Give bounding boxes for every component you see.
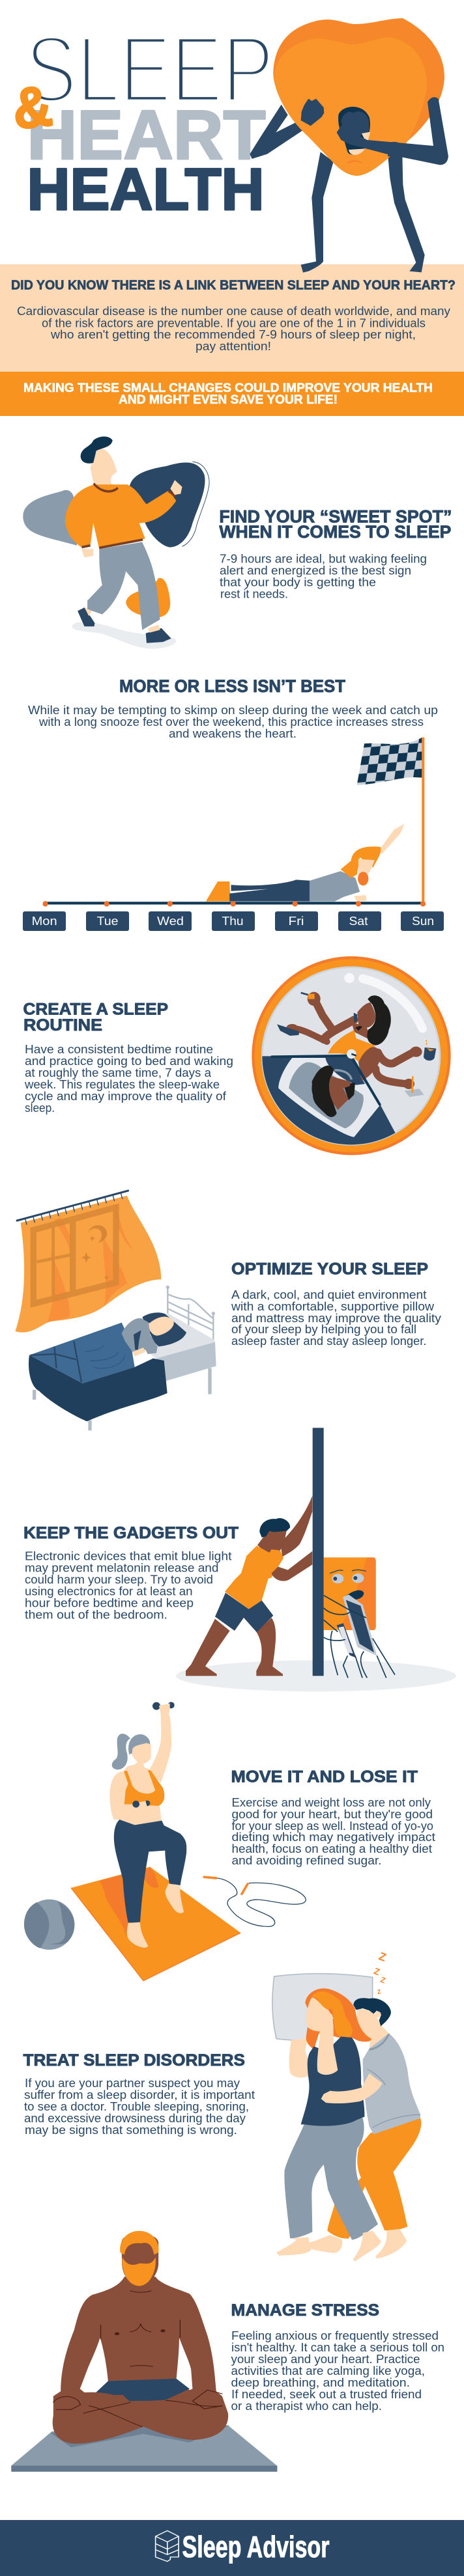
label: Mon — [23, 911, 66, 931]
panel: orange call to action band — [0, 372, 464, 416]
label: Tue — [86, 911, 129, 931]
label: Tue: Tue — [96, 915, 119, 928]
text block: cardiovascular intro: who aren't getting the recommended 7-9 hours of sleep per night, — [50, 327, 416, 341]
icon: bedroom with curtain and sleeping man — [15, 1191, 216, 1430]
icon: mattress logo — [156, 2530, 179, 2562]
text block: sleep routine: week. This regulates the sleep-wake — [24, 1077, 220, 1091]
label: Sat — [338, 911, 381, 931]
title ampersand: & — [10, 73, 55, 141]
icon: skipping rope — [204, 1877, 306, 1926]
icon: bed — [29, 1286, 216, 1430]
icon: arms and props — [277, 992, 436, 1097]
text block: move it: health, focus on eating a healthy diet — [232, 1842, 432, 1855]
text block: more or less: and weakens the heart. — [169, 727, 297, 740]
icon: mat — [71, 1867, 240, 1981]
heading: keep the gadgets out: KEEP THE GADGETS OUT — [23, 1524, 239, 1542]
text block: disorders — [24, 2076, 255, 2137]
label: Fri — [275, 911, 318, 931]
icon: snore letters: Z — [373, 1965, 382, 1977]
title — [10, 16, 274, 223]
icon: woman in navy shirt and grey pants — [284, 1988, 383, 2240]
icon: exercise ball — [24, 1900, 74, 1950]
text block: move it: for your sleep as well. Instead of yo-yo — [232, 1819, 433, 1833]
text block: disorders: suffer from a sleep disorder, it is important — [24, 2088, 255, 2101]
panel: intro peach band — [0, 264, 464, 372]
text block: sleep routine: and practice going to bed and waking — [25, 1054, 233, 1068]
flag pole — [422, 738, 424, 904]
text block: manage stress: deep breathing, and meditation. — [231, 2375, 410, 2389]
icon: snore letters: Z — [379, 1975, 387, 1985]
text block: sleep routine — [24, 1042, 233, 1115]
label: Wed: Wed — [157, 915, 184, 928]
text block: gadgets: Electronic devices that emit blue light — [25, 1549, 231, 1563]
icon: man — [186, 1495, 312, 1676]
heading: create a sleep routine — [23, 1000, 168, 1034]
heading: create a sleep routine: ROUTINE — [23, 1016, 102, 1034]
text block: sleep routine: Have a consistent bedtime routine — [25, 1042, 213, 1056]
text block: disorders: If you are your partner suspect you may — [25, 2076, 240, 2090]
text block: sweet spot: that your body is getting the — [220, 575, 376, 589]
text block: gadgets: could harm your sleep. Try to avoid — [25, 1573, 213, 1586]
text block: gadgets: them out of the bedroom. — [25, 1608, 167, 1621]
heading: find your sweet spot: FIND YOUR “SWEET SPOT” — [219, 506, 452, 526]
label: Fri: Fri — [288, 915, 304, 928]
icon: heart character covering its mouth — [250, 18, 448, 273]
text block: cardiovascular intro: pay attention! — [196, 339, 271, 353]
text block: sweet spot: rest it needs. — [220, 587, 288, 600]
icon: head with orange hair and beard — [120, 2231, 158, 2286]
icon: curtain — [15, 1191, 161, 1333]
text block: sweet spot: 7-9 hours are ideal, but waking feeling — [220, 551, 427, 565]
icon: man walking with blobs — [23, 437, 209, 649]
text block: gadgets — [25, 1549, 231, 1621]
title word: HEART: HEART — [27, 96, 266, 174]
heading: more or less: MORE OR LESS ISN’T BEST — [119, 676, 345, 696]
icon: tired orange screen — [324, 1557, 395, 1678]
call to action text — [23, 381, 433, 407]
text block: gadgets: hour before bedtime and keep — [25, 1596, 194, 1609]
heading: find your sweet spot — [219, 506, 452, 542]
text block: sweet spot: alert and energized is the best sign — [220, 563, 411, 577]
text block: cardiovascular intro: Cardiovascular disease is the number one cause of death worldwide, and many — [17, 304, 451, 318]
text block: manage stress: or a therapist who can help. — [231, 2399, 382, 2413]
text block: move it: and avoiding refined sugar. — [232, 1853, 382, 1867]
text block: move it: Exercise and weight loss are not only — [232, 1795, 431, 1809]
text block: disorders: may be signs that something is wrong. — [25, 2123, 237, 2137]
axis line — [46, 902, 423, 904]
icon: arms — [349, 97, 448, 165]
text block: optimize: asleep faster and stay asleep longer. — [231, 1334, 426, 1348]
label: Mon: Mon — [32, 915, 57, 928]
icon: man meditating on mat — [11, 2231, 277, 2472]
icon: pillow — [272, 1974, 373, 2040]
text block: manage stress: If needed, seek out a trusted friend — [231, 2387, 422, 2401]
heading: create a sleep routine: CREATE A SLEEP — [23, 1000, 168, 1018]
icon: man in grey shirt and orange pants — [327, 1998, 421, 2239]
icon: snore letters — [373, 1950, 388, 1995]
call to action text: AND MIGHT EVEN SAVE YOUR LIFE! — [119, 393, 338, 407]
title word: HEALTH: HEALTH — [27, 157, 265, 223]
text block: gadgets: may prevent melatonin release and — [25, 1561, 219, 1574]
text block: sleep routine: sleep. — [25, 1101, 55, 1115]
wall post — [313, 1428, 324, 1676]
text block: move it: good for your heart, but they're good — [232, 1807, 433, 1821]
heading: did you know: DID YOU KNOW THERE IS A LINK BETWEEN SLEEP AND YOUR HEART? — [11, 278, 456, 292]
day markers — [42, 901, 426, 907]
text block: optimize: and mattress may improve the quality — [231, 1311, 442, 1325]
text block: disorders: to see a doctor. Trouble sleeping, snoring, — [24, 2099, 249, 2113]
call to action text: MAKING THESE SMALL CHANGES COULD IMPROVE YOUR HEALTH — [23, 381, 433, 395]
text block: manage stress: your sleep and your heart. Practice — [231, 2352, 420, 2366]
text block: more or less: with a long snooze fest over the weekend, this practice increases stress — [38, 715, 424, 728]
label: Thu — [212, 911, 255, 931]
text block: gadgets: using electronics for at least an — [25, 1585, 193, 1598]
icon: multitasking woman in round bubble — [252, 956, 451, 1155]
heading: manage stress: MANAGE STRESS — [231, 2301, 379, 2320]
text block: move it — [232, 1795, 435, 1867]
icon: dumbbell raised — [152, 1702, 175, 1710]
label: Sun — [401, 911, 444, 931]
label: Sun: Sun — [412, 915, 434, 928]
text block: manage stress: Feeling anxious or frequently stressed — [231, 2329, 439, 2342]
logo text: Sleep Advisor — [182, 2530, 330, 2564]
text block: sleep routine: at roughly the same time, 7 days a — [25, 1066, 212, 1079]
icon: man pushing wall with gadgets behind — [176, 1428, 456, 1691]
text block: optimize: with a comfortable, supportive pillow — [231, 1299, 435, 1313]
text block: manage stress: isn't healthy. It can take a serious toll on — [231, 2340, 444, 2354]
title word: SLEEP: SLEEP — [25, 16, 274, 122]
text block: sweet spot — [220, 551, 427, 600]
text block: more or less: While it may be tempting to skimp on sleep during the week and catch up — [28, 703, 438, 717]
icon: checkered flag — [357, 738, 422, 785]
text block: optimize: A dark, cool, and quiet environment — [231, 1288, 426, 1301]
icon: covered mouth — [338, 107, 370, 155]
label: Sat: Sat — [349, 915, 368, 928]
text block: manage stress — [231, 2329, 444, 2413]
text block: optimize: of your sleep by helping you to fall — [231, 1322, 416, 1336]
icon: couple spooning on a pillow — [272, 1950, 421, 2262]
text block: optimize — [231, 1288, 442, 1348]
icon: feet — [276, 2229, 407, 2262]
text block: move it: dieting which may negatively impact — [232, 1830, 435, 1844]
icon: snore letters: Z — [377, 1988, 382, 1995]
label: Wed — [149, 911, 192, 931]
text block: more or less — [28, 703, 438, 740]
icon: woman exercising on mat — [24, 1702, 306, 1981]
icon: snore letters: Z — [377, 1950, 388, 1964]
heading: treat sleep disorders: TREAT SLEEP DISORDERS — [23, 2051, 245, 2070]
timeline illustration — [42, 738, 426, 907]
text block: manage stress: activities that are calming like yoga, — [231, 2364, 425, 2377]
chart: week timeline — [23, 738, 444, 931]
icon: woman crawling — [206, 824, 404, 902]
label: Thu: Thu — [222, 915, 244, 928]
text block: cardiovascular intro — [17, 304, 451, 353]
footer band — [0, 2520, 464, 2576]
heading: find your sweet spot: WHEN IT COMES TO SLEEP — [219, 522, 451, 542]
text block: cardiovascular intro: of the risk factors are preventable. If you are one of the 1 in 7 individuals — [42, 316, 426, 329]
heading: move it and lose it: MOVE IT AND LOSE IT — [231, 1768, 418, 1786]
text block: sleep routine: cycle and may improve the quality of — [25, 1089, 227, 1103]
heading: optimize your sleep: OPTIMIZE YOUR SLEEP — [231, 1260, 428, 1279]
text block: disorders: and excessive drowsiness during the day — [24, 2111, 246, 2125]
